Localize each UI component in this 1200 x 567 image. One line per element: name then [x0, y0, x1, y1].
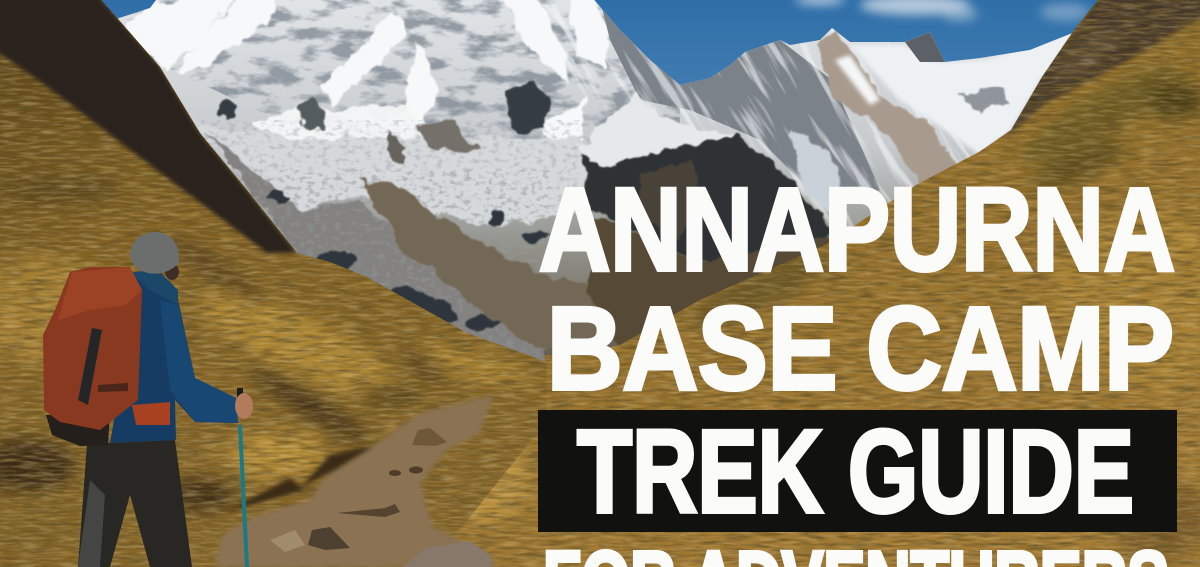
- right ridge: snow field: [854, 33, 1072, 154]
- trail shadows and grass edge: [225, 445, 375, 512]
- brown moraine: [360, 178, 620, 350]
- lower ridge snow apron: [788, 130, 841, 214]
- grey scree below the glacier: [205, 130, 550, 370]
- right grass texture: [400, 0, 1200, 567]
- jacket: [110, 272, 238, 443]
- trousers: [78, 440, 192, 567]
- mountain base tone: [100, 0, 1100, 355]
- right grassy slope: [400, 0, 1200, 567]
- right rock cliff: [1005, 0, 1200, 138]
- main face rock texture: [124, 0, 680, 140]
- trail rocks: [412, 428, 447, 446]
- outcrop snow cap: [580, 95, 735, 170]
- hiker head and cap: [130, 232, 179, 280]
- lower brown slope: [590, 215, 830, 350]
- collar: [130, 270, 178, 305]
- backpack: [43, 267, 170, 446]
- trail: [215, 395, 500, 567]
- right ridge: striped grey rock: [544, 0, 970, 226]
- left grassy slope: [0, 0, 555, 567]
- glacier: [190, 120, 590, 230]
- main face snow slopes: [120, 0, 610, 155]
- mountain massif: [100, 0, 1100, 370]
- title: [538, 164, 1177, 567]
- sky: [0, 0, 1200, 150]
- left grass texture: [0, 0, 555, 567]
- left dark rocky band: [0, 0, 297, 253]
- right ridge: tan rock buttress: [818, 28, 960, 185]
- dark outcrop: [582, 135, 835, 262]
- hand: [235, 393, 253, 419]
- trekking pole: [240, 425, 247, 567]
- clouds: [795, 0, 1090, 21]
- dark rock patches on main face: [218, 82, 552, 165]
- hiker: [43, 232, 253, 567]
